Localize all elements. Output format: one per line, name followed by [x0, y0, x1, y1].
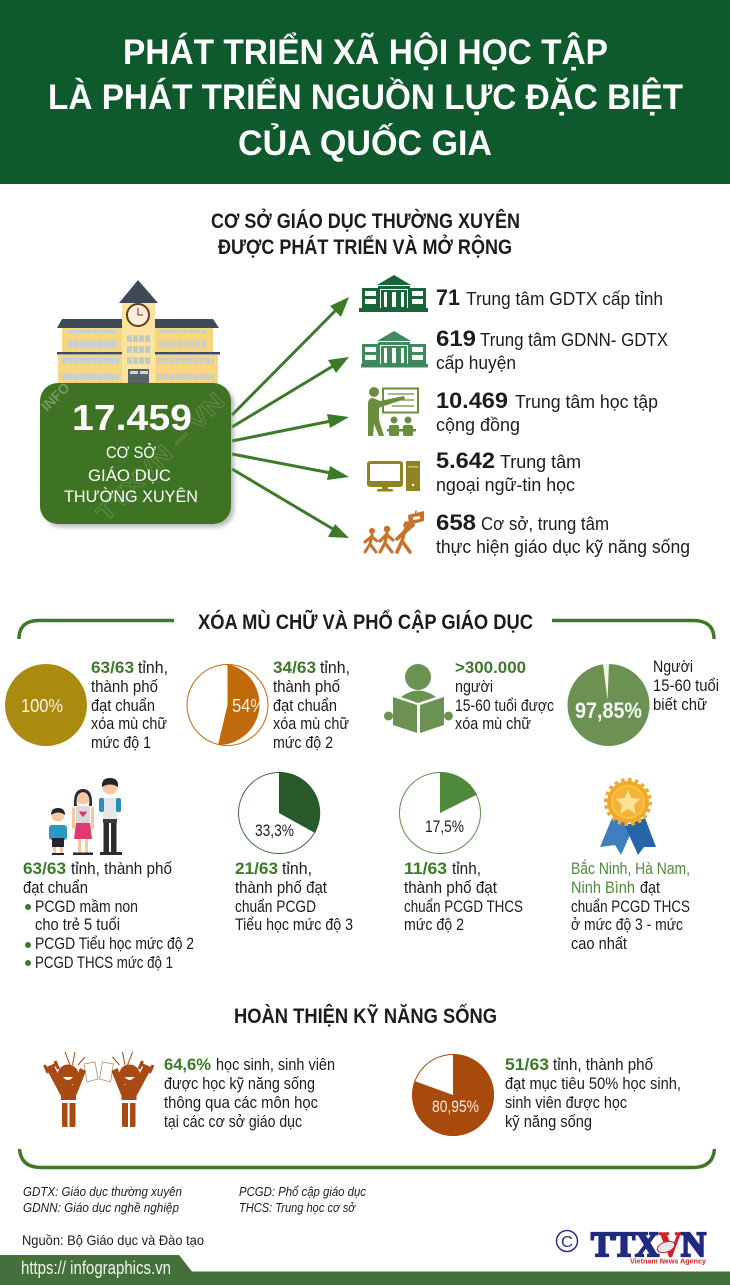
text: 51/63 provinces	[505, 1056, 681, 1131]
text: 63/63 universal education list: cho trẻ 5 tuổi	[35, 916, 120, 934]
pie chart: 100%: 100%	[21, 696, 63, 716]
icon: person reading book	[384, 664, 453, 733]
header banner with title	[0, 0, 730, 184]
text: 64.6% students: học sinh, sinh viên	[216, 1056, 335, 1074]
text: 63/63 universal education list: tỉnh, thành phố	[71, 860, 172, 878]
logo: TTXVN: N	[681, 1225, 706, 1264]
text: 63/63 level 1 literacy: thành phố	[91, 678, 158, 696]
text: over 300,000 people: xóa mù chữ	[455, 715, 531, 733]
icon: teacher at board	[368, 387, 418, 436]
icon: provincial centre building	[359, 275, 428, 312]
pie chart: 97.85%: 97,85%	[575, 698, 642, 723]
text: 63/63 universal education list: 63/63	[23, 860, 66, 878]
text: 34/63 level 2 literacy: thành phố	[273, 678, 340, 696]
text: 63/63 universal education list	[23, 860, 194, 972]
icon: three children	[49, 778, 122, 855]
text: 71 provincial centres: Trung tâm GDTX cấp tỉnh	[466, 288, 663, 309]
text: 64.6% students: tại các cơ sở giáo dục	[164, 1113, 302, 1131]
logo: TTXVN: TTX	[591, 1225, 659, 1264]
source line: Nguồn: Bộ Giáo dục và Đào tạo	[22, 1232, 204, 1248]
logo: TTXVN	[556, 1225, 707, 1266]
text: 11/63 lower secondary level 2: chuẩn PCGD THCS	[404, 898, 523, 916]
text: 34/63 level 2 literacy: 34/63	[273, 659, 316, 677]
text: 10,469 community centres: Trung tâm học tập	[515, 391, 658, 412]
text: 619 district centres	[436, 326, 668, 373]
text: 34/63 level 2 literacy: mức độ 2	[273, 734, 333, 752]
text: 71 provincial centres: 71	[436, 285, 460, 310]
icon: school building	[57, 280, 220, 385]
text: 11/63 lower secondary level 2: thành phố đạt	[404, 879, 497, 897]
glossary of abbreviations: GDNN: Giáo dục nghề nghiệp	[23, 1201, 179, 1215]
text: highest level provinces: ở mức độ 3 - mức	[571, 916, 683, 934]
text: 10,469 community centres: cộng đồng	[436, 414, 520, 435]
text: 619 district centres: 619	[436, 326, 476, 351]
text: 11/63 lower secondary level 2: 11/63	[404, 860, 447, 878]
text: 619 district centres: Trung tâm GDNN- GDTX	[480, 329, 668, 350]
text: literate people aged 15-60: Người	[653, 658, 693, 676]
text: 51/63 provinces: đạt mục tiêu 50% học sinh,	[505, 1075, 681, 1093]
text: 658 life skills facilities	[436, 510, 690, 557]
text: 34/63 level 2 literacy	[273, 659, 350, 752]
logo: TTXVN: C	[561, 1234, 573, 1251]
text: 64.6% students: được học kỹ năng sống	[164, 1075, 315, 1093]
text: over 300,000 people: >300.000	[455, 659, 526, 677]
heading: continuing education: ĐƯỢC PHÁT TRIỂN VÀ MỞ RỘNG	[218, 235, 512, 259]
icon: medal	[600, 780, 656, 855]
text: 63/63 level 1 literacy: mức độ 1	[91, 734, 151, 752]
footer bar with URL	[0, 1255, 730, 1285]
glossary of abbreviations: GDTX: Giáo dục thường xuyên	[23, 1185, 182, 1199]
icon: two people exercising	[44, 1052, 153, 1127]
text: 63/63 universal education list: PCGD THCS mức độ 1	[35, 954, 173, 972]
text: highest level provinces: Bắc Ninh, Hà Nam,	[571, 859, 690, 878]
heading: literacy and universal education	[19, 610, 714, 639]
pie chart: 100%	[5, 664, 87, 746]
heading: life skills: HOÀN THIỆN KỸ NĂNG SỐNG	[234, 1004, 497, 1028]
pie chart: 17.5%: 17,5%	[425, 818, 464, 836]
text: over 300,000 people: 15-60 tuổi được	[455, 697, 554, 715]
icon: people marching with sign	[365, 511, 424, 552]
text: 10,469 community centres	[436, 388, 658, 435]
pie chart: 80.95%	[412, 1054, 494, 1136]
text: 51/63 provinces: sinh viên được học	[505, 1094, 627, 1112]
text: 5,642 language and IT centres: ngoại ngữ-tin học	[436, 474, 575, 495]
text: 34/63 level 2 literacy: tỉnh,	[320, 659, 350, 677]
text: 21/63 primary level 3	[235, 860, 353, 934]
pie chart: 17.5%	[400, 772, 480, 854]
pie chart: 33.3%	[238, 772, 320, 854]
text: 21/63 primary level 3: 21/63	[235, 860, 278, 878]
panel: total facilities	[38, 379, 234, 527]
text: 21/63 primary level 3: Tiểu học mức độ 3	[235, 916, 353, 934]
text: 5,642 language and IT centres	[436, 448, 581, 495]
pie chart: 97.85%	[568, 664, 650, 746]
icon: district centre building	[361, 331, 428, 368]
pie chart: 54%	[187, 664, 268, 746]
text: 5,642 language and IT centres: Trung tâm	[500, 451, 581, 472]
text: 11/63 lower secondary level 2: mức độ 2	[404, 916, 464, 934]
text: 64.6% students: 64,6%	[164, 1056, 211, 1074]
text: highest level provinces: chuẩn PCGD THCS	[571, 898, 690, 916]
text: 11/63 lower secondary level 2: tỉnh,	[452, 860, 481, 878]
text: 619 district centres: cấp huyện	[436, 352, 516, 373]
text: 21/63 primary level 3: tỉnh,	[282, 860, 312, 878]
heading: continuing education: CƠ SỞ GIÁO DỤC THƯỜNG XUYÊN	[211, 209, 520, 233]
text: highest level provinces	[571, 859, 690, 953]
text: 64.6% students	[164, 1056, 335, 1131]
glossary of abbreviations	[23, 1185, 367, 1215]
text: 71 provincial centres	[436, 285, 663, 310]
text: 63/63 universal education list: PCGD mầm non	[35, 898, 138, 916]
panel: total facilities: TTXVN – VN	[91, 388, 230, 527]
text: 34/63 level 2 literacy: đạt chuẩn	[273, 697, 337, 715]
panel: total facilities: INFO	[38, 379, 73, 414]
heading: literacy and universal education: XÓA MÙ CHỮ VÀ PHỔ CẬP GIÁO DỤC	[198, 610, 533, 634]
text: 64.6% students: thông qua các môn học	[164, 1094, 318, 1112]
pie chart: 33.3%: 33,3%	[255, 822, 294, 840]
icon: desktop computer	[367, 461, 420, 492]
footer bar with URL: https:// infographics.vn	[21, 1258, 171, 1278]
text: over 300,000 people: người	[455, 678, 493, 696]
text: 21/63 primary level 3: thành phố đạt	[235, 879, 327, 897]
panel: total facilities: THƯỜNG XUYÊN	[64, 487, 198, 506]
logo: TTXVN: V	[659, 1225, 682, 1264]
text: 658 life skills facilities: thực hiện giáo dục kỹ năng sống	[436, 536, 690, 557]
text: 658 life skills facilities: 658	[436, 510, 476, 535]
panel: total facilities: CƠ SỞ	[106, 443, 156, 462]
text: 51/63 provinces: kỹ năng sống	[505, 1113, 592, 1131]
text: literate people aged 15-60: biết chữ	[653, 696, 707, 714]
text: 63/63 level 1 literacy: đạt chuẩn	[91, 697, 155, 715]
pie chart: 80.95%: 80,95%	[432, 1098, 479, 1116]
text: 63/63 level 1 literacy: 63/63	[91, 659, 134, 677]
text: 63/63 universal education list: PCGD Tiểu học mức độ 2	[35, 935, 194, 953]
text: 658 life skills facilities: Cơ sở, trung tâm	[481, 513, 609, 534]
text: 51/63 provinces: 51/63	[505, 1056, 549, 1074]
text: 63/63 universal education list: đạt chuẩn	[23, 879, 88, 897]
heading: continuing education	[211, 209, 520, 259]
pie chart: 54%: 54%	[232, 696, 265, 716]
text: highest level provinces: cao nhất	[571, 935, 627, 953]
text: 63/63 level 1 literacy	[91, 659, 168, 752]
text: 5,642 language and IT centres: 5.642	[436, 448, 495, 473]
header banner with title: LÀ PHÁT TRIỂN NGUỒN LỰC ĐẶC BIỆT	[48, 77, 683, 117]
text: 63/63 level 1 literacy: xóa mù chữ	[91, 715, 167, 733]
header banner with title: PHÁT TRIỂN XÃ HỘI HỌC TẬP	[123, 32, 608, 72]
text: 11/63 lower secondary level 2	[404, 860, 523, 934]
arrows: from total to categories	[232, 297, 349, 538]
glossary of abbreviations: THCS: Trung học cơ sở	[239, 1201, 356, 1215]
text: literate people aged 15-60: 15-60 tuổi	[653, 677, 719, 695]
text: highest level provinces: Ninh Bình	[571, 879, 635, 897]
text: highest level provinces: đạt	[640, 879, 660, 897]
header banner with title: CỦA QUỐC GIA	[238, 123, 492, 163]
text: literate people aged 15-60	[653, 658, 719, 714]
text: 51/63 provinces: tỉnh, thành phố	[553, 1056, 653, 1074]
logo: TTXVN: Vietnam News Agency	[630, 1256, 707, 1266]
text: 10,469 community centres: 10.469	[436, 388, 508, 413]
text: over 300,000 people	[455, 659, 554, 733]
text: 34/63 level 2 literacy: xóa mù chữ	[273, 715, 349, 733]
text: 63/63 level 1 literacy: tỉnh,	[138, 659, 168, 677]
panel: total facilities: GIÁO DỤC	[88, 466, 171, 485]
panel: total facilities: 17.459	[72, 397, 192, 438]
glossary of abbreviations: PCGD: Phổ cập giáo dục	[239, 1185, 367, 1199]
text: 21/63 primary level 3: chuẩn PCGD	[235, 898, 316, 916]
